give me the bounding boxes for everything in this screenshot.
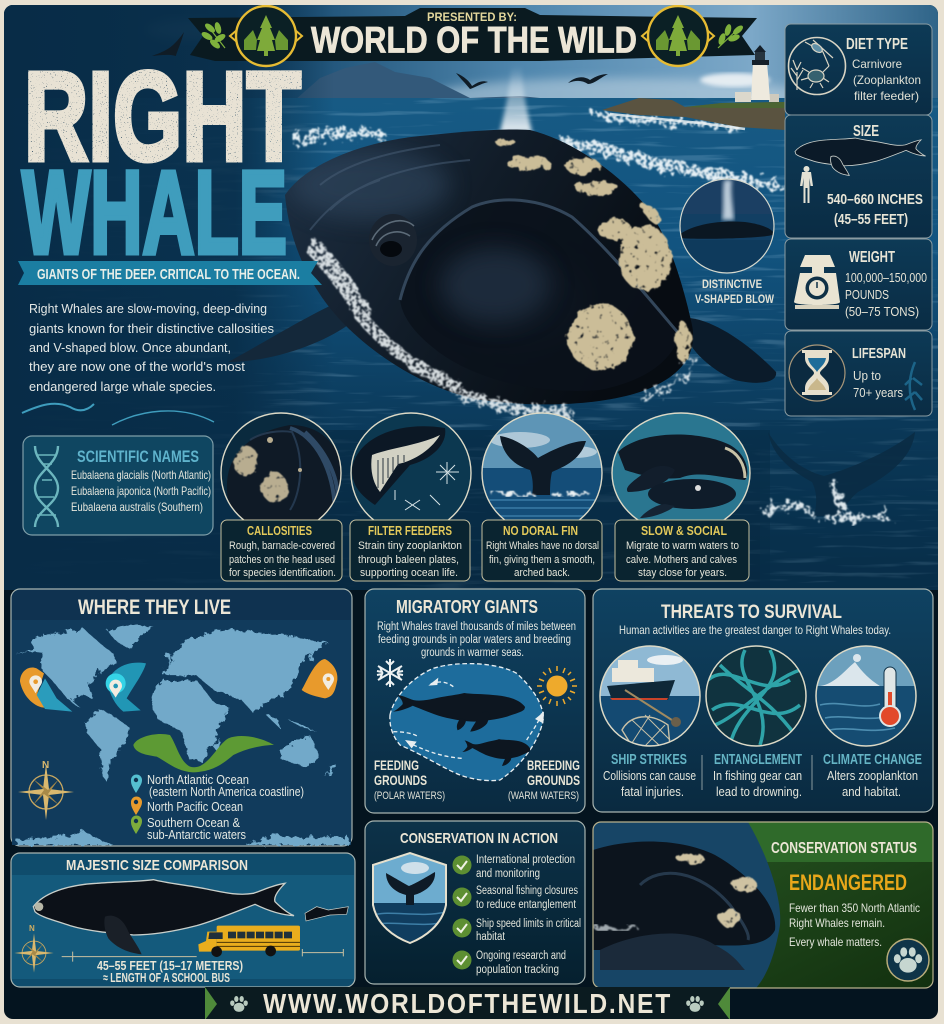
small whale — [462, 739, 530, 766]
legend: sub-Antarctic waters — [147, 827, 246, 842]
feature: filter feeders: Strain tiny zooplankton — [358, 540, 462, 552]
panel: size: (45–55 FEET) — [834, 211, 908, 228]
world map — [16, 625, 349, 845]
panel: lifespan: 70+ years — [853, 385, 903, 400]
feature: no dorsal fin: fin, giving them a smooth, — [489, 554, 595, 566]
intro text: Right Whales are slow-moving, deep-diving — [29, 301, 267, 316]
blow inset: DISTINCTIVE — [702, 277, 762, 291]
panel: size: SIZE — [853, 123, 879, 140]
panel: threats to survival: Collisions can cause — [603, 768, 696, 783]
ruler — [62, 949, 343, 962]
panel: scientific names: Eubalaena japonica (North Pacific) — [71, 484, 211, 498]
panel: size comparison — [11, 853, 355, 987]
checklist: and monitoring — [476, 868, 540, 880]
checklist: habitat — [476, 931, 506, 943]
panel: migratory giants: Right Whales travel thousands of miles between — [377, 621, 576, 633]
icon: leaf left — [202, 22, 226, 48]
feature: slow and social: SLOW & SOCIAL — [641, 523, 727, 538]
feature: slow and social: Migrate to warm waters to — [626, 540, 739, 552]
feature: slow and social — [612, 413, 750, 581]
icon: whale silhouette — [795, 138, 926, 175]
legend: North Atlantic Ocean — [147, 772, 249, 787]
main whale — [228, 129, 776, 412]
panel: threats to survival: ENTANGLEMENT — [714, 751, 802, 768]
panel: threats to survival: THREATS TO SURVIVAL — [661, 602, 842, 623]
panel: weight — [785, 239, 932, 330]
checklist: Ship speed limits in critical — [476, 918, 581, 930]
breeding grounds label: BREEDING — [527, 757, 580, 773]
feature: callosities — [221, 413, 345, 581]
threat: entanglement — [706, 646, 806, 746]
feature: callosities: for species identification. — [229, 567, 336, 579]
panel: lifespan: LIFESPAN — [852, 345, 906, 362]
panel: diet type: Carnivore — [852, 57, 902, 71]
checklist: to reduce entanglement — [476, 899, 577, 911]
checklist: Seasonal fishing closures — [476, 885, 578, 897]
legend: Southern Ocean & — [147, 815, 240, 830]
panel: migratory giants — [365, 589, 585, 813]
breeding grounds label: GROUNDS — [527, 772, 580, 788]
panel: size — [785, 115, 932, 238]
panel: size comparison: 45–55 FEET (15–17 METERS) — [97, 958, 243, 973]
big whale — [393, 693, 525, 732]
header banner: WORLD OF THE WILD — [311, 20, 637, 60]
feature: filter feeders: through baleen plates, — [358, 554, 459, 566]
ribbon tagline — [18, 261, 322, 285]
header banner: PRESENTED BY: — [427, 10, 517, 24]
tail fluke in background — [762, 432, 915, 518]
icon: person — [800, 166, 813, 203]
intro text: and V-shaped blow. Once abundant, — [29, 340, 231, 355]
hero scene: ocean and sky — [4, 5, 940, 590]
icon: compass — [18, 760, 74, 820]
panel: diet type: DIET TYPE — [846, 36, 908, 53]
diver — [305, 907, 348, 921]
legend: (eastern North America coastline) — [149, 784, 304, 799]
intro text: endangered large whale species. — [29, 379, 216, 394]
legend: North Pacific Ocean — [147, 799, 243, 814]
panel: weight: (50–75 TONS) — [845, 304, 919, 319]
panel: size comparison: MAJESTIC SIZE COMPARISON — [66, 857, 248, 874]
panel: lifespan — [785, 331, 932, 416]
lighthouse and island — [602, 45, 785, 130]
panel: migratory giants: grounds in warmer seas. — [421, 647, 524, 659]
intro text — [29, 301, 274, 394]
blow inset — [680, 179, 775, 306]
logo badge right — [642, 6, 714, 66]
photo: whales — [593, 842, 775, 970]
panel: scientific names: Eubalaena glacialis (North Atlantic) — [71, 468, 211, 482]
header banner — [188, 6, 757, 66]
panel: weight: POUNDS — [845, 287, 889, 302]
school bus — [198, 926, 300, 957]
legend — [131, 772, 304, 842]
breeding sublabel: (WARM WATERS) — [508, 790, 579, 802]
icon: DNA — [35, 446, 58, 527]
panel: weight: 100,000–150,000 — [845, 270, 927, 285]
blow spout — [500, 66, 532, 132]
migration loop — [390, 664, 544, 781]
ribbon tagline: GIANTS OF THE DEEP. CRITICAL TO THE OCEAN. — [37, 266, 300, 283]
logo badge left — [230, 6, 302, 66]
side-view whale — [33, 880, 294, 954]
wave flourishes — [22, 404, 214, 425]
feature: slow and social: calve. Mothers and calves — [626, 554, 737, 566]
panel: conservation in action — [365, 821, 585, 984]
feature: no dorsal fin: arched back. — [514, 567, 570, 579]
panel: threats to survival: Alters zooplankton — [827, 768, 918, 783]
panel: conservation status: Right Whales remain. — [789, 916, 885, 930]
feature: callosities: CALLOSITIES — [247, 523, 312, 538]
panel: conservation status: Every whale matters. — [789, 935, 882, 949]
feature: filter feeders — [350, 413, 471, 581]
icon: sun — [537, 666, 577, 706]
checklist: International protection — [476, 854, 575, 866]
panel: conservation status — [593, 822, 933, 988]
panel: lifespan: Up to — [853, 368, 881, 383]
panel: conservation in action: CONSERVATION IN ACTION — [400, 830, 558, 847]
panel: size: 540–660 INCHES — [827, 191, 923, 208]
panel: diet type: filter feeder) — [854, 89, 919, 103]
icon: plankton — [788, 38, 846, 94]
threat: ship strikes — [600, 646, 700, 746]
panel: diet type: (Zooplankton — [853, 73, 921, 87]
feature: callosities: patches on the head used — [229, 554, 335, 566]
panel: migratory giants: feeding grounds in polar waters and breeding — [378, 634, 571, 646]
foam — [312, 245, 696, 412]
icon: scale — [794, 255, 840, 309]
icon: compass small — [14, 924, 54, 973]
title: RIGHT WHALE — [20, 69, 302, 256]
panel: where they live — [11, 589, 352, 846]
panel: weight: WEIGHT — [849, 249, 895, 266]
panel: scientific names: Eubalaena australis (Southern) — [71, 500, 203, 514]
icon: compass small: N — [29, 924, 35, 933]
feeding grounds label: GROUNDS — [374, 772, 427, 788]
icon: paw badge — [887, 939, 929, 981]
feeding grounds label: FEEDING — [374, 757, 419, 773]
intro text: they are now one of the world's most — [29, 359, 245, 374]
panel: threats to survival: SHIP STRIKES — [611, 751, 687, 768]
panel: size comparison: ≈ LENGTH OF A SCHOOL BUS — [103, 970, 230, 985]
icon: compass: N — [42, 760, 49, 771]
feature: no dorsal fin: NO DORAL FIN — [503, 523, 578, 538]
icon: snowflake — [377, 659, 403, 687]
checklist: Ongoing research and — [476, 950, 566, 962]
panel: threats to survival: fatal injuries. — [621, 784, 684, 799]
breeding grounds label — [527, 757, 580, 788]
footer banner: WWW.WORLDOFTHEWILD.NET — [263, 988, 672, 1019]
panel: threats to survival — [593, 589, 933, 812]
feeding grounds label — [374, 757, 427, 788]
feature: no dorsal fin — [480, 413, 604, 581]
feature: slow and social: stay close for years. — [638, 567, 727, 579]
feature: callosities: Rough, barnacle-covered — [229, 540, 335, 552]
panel: threats to survival: In fishing gear can — [713, 768, 802, 783]
callosities — [495, 138, 691, 370]
panel: scientific names: SCIENTIFIC NAMES — [77, 447, 199, 466]
checklist: population tracking — [476, 964, 559, 976]
feature: filter feeders: FILTER FEEDERS — [368, 523, 452, 538]
checklist — [452, 854, 581, 976]
title: RIGHT WHALE: WHALE — [22, 147, 287, 279]
feature: no dorsal fin: Right Whales have no dorsal — [486, 540, 599, 552]
threat: climate change — [816, 646, 916, 746]
panel: threats to survival: and habitat. — [842, 784, 901, 799]
panel: conservation status: Fewer than 350 North Atlantic — [789, 901, 920, 915]
feeding sublabel: (POLAR WATERS) — [374, 790, 445, 802]
panel: scientific names — [23, 436, 213, 535]
panel: migratory giants: MIGRATORY GIANTS — [396, 597, 538, 617]
intro text: giants known for their distinctive callosities — [29, 321, 274, 336]
panel: diet type — [785, 24, 932, 115]
title: RIGHT WHALE: RIGHT — [24, 46, 301, 187]
eye — [371, 214, 414, 257]
panel: threats to survival: lead to drowning. — [716, 784, 802, 799]
icon: birds — [152, 32, 608, 89]
icon: hourglass — [789, 345, 845, 401]
panel: conservation status: ENDANGERED — [789, 870, 907, 895]
feature: filter feeders: supporting ocean life. — [360, 567, 458, 579]
panel: where they live: WHERE THEY LIVE — [78, 596, 231, 619]
icon: shield — [373, 853, 446, 945]
blow inset: V-SHAPED BLOW — [695, 292, 775, 306]
icon: leaf right — [717, 23, 745, 48]
